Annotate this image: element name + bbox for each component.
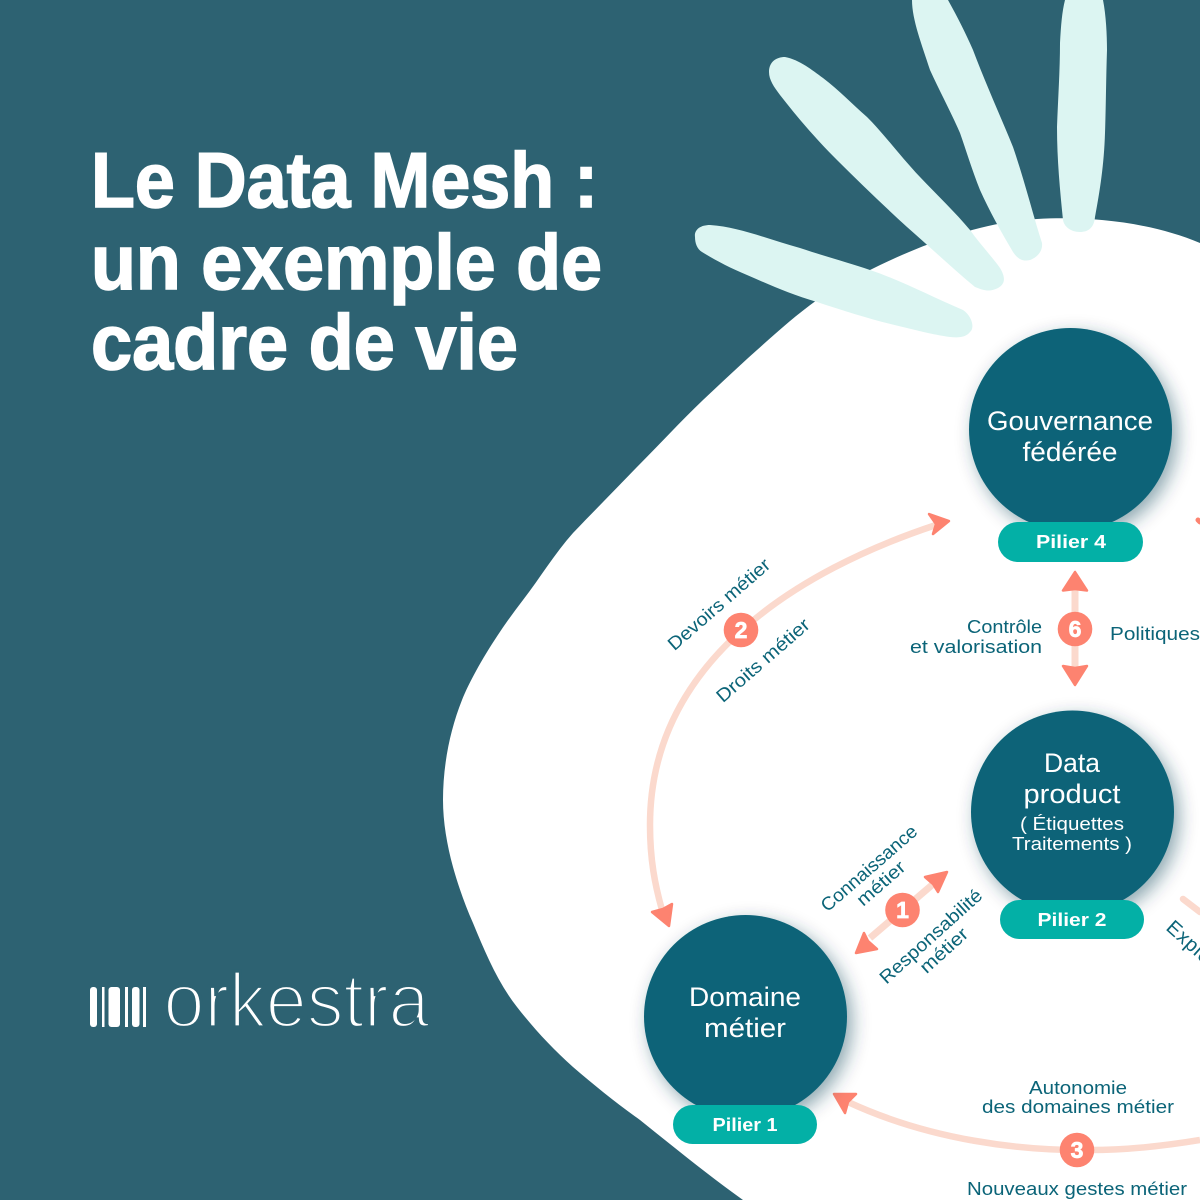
node: Gouvernance fédérée: fédérée	[1022, 437, 1118, 467]
icon: logo bars	[90, 987, 146, 1027]
label: métier (connaissance): métier	[852, 856, 910, 910]
label: métier (responsabilité): métier	[915, 923, 972, 977]
pill: Pilier 4	[998, 522, 1143, 562]
badge 6: 6	[1069, 616, 1081, 642]
label: Autonomie des domaines métier	[982, 1077, 1174, 1117]
node: Domaine métier	[644, 915, 847, 1144]
node: Domaine métier: Domaine	[689, 982, 801, 1012]
white blob	[443, 218, 1200, 1200]
logo wordmark: orkestra	[164, 958, 430, 1044]
node: Domaine métier: métier	[704, 1013, 786, 1043]
petals	[695, 0, 1107, 337]
pill: Pilier 2	[1000, 900, 1144, 939]
label: Autonomie des domaines métier: Autonomie	[1029, 1077, 1127, 1098]
badge 2	[724, 613, 758, 647]
pill: Pilier 1	[673, 1105, 817, 1144]
arrow: autonomie arc	[834, 1094, 1200, 1150]
title	[91, 136, 602, 386]
label: Contrôle et valorisation: et valorisation	[910, 636, 1042, 657]
arrow: contrôle	[1063, 572, 1087, 685]
label: Devoirs métier: Devoirs métier	[663, 554, 774, 654]
badge 3	[1060, 1133, 1094, 1167]
node: Data product	[971, 710, 1174, 939]
arrow: right partial	[1183, 520, 1200, 912]
arrow: droits et devoirs arc	[650, 514, 949, 926]
label: Connaissance: Connaissance	[816, 820, 921, 916]
badge 6	[1058, 612, 1092, 646]
logo: orkestra	[90, 958, 430, 1044]
label: Nouveaux gestes métier: Nouveaux gestes métier	[967, 1178, 1187, 1199]
badge 1	[885, 893, 920, 927]
node: Data product: product	[1024, 779, 1121, 809]
node: Data product: Traitements )	[1012, 833, 1132, 854]
badge 1: 1	[896, 897, 909, 923]
label: Autonomie des domaines métier: des domaines métier	[982, 1096, 1174, 1117]
node: Gouvernance fédérée: Gouvernance	[987, 406, 1153, 436]
pill: Pilier 1: Pilier 1	[712, 1114, 778, 1135]
badge 2: 2	[735, 617, 747, 643]
node: Data product: ( Étiquettes	[1020, 813, 1124, 834]
label: Contrôle et valorisation	[910, 616, 1042, 657]
label: Droits métier: Droits métier	[712, 614, 814, 706]
badge 3: 3	[1071, 1137, 1083, 1163]
node: Gouvernance fédérée	[969, 328, 1172, 562]
pill: Pilier 2: Pilier 2	[1038, 909, 1106, 930]
title: Le Data Mesh :	[91, 136, 598, 224]
label: Contrôle et valorisation: Contrôle	[967, 616, 1042, 637]
pill: Pilier 4: Pilier 4	[1036, 531, 1107, 552]
title: un exemple de	[91, 218, 602, 306]
title: cadre de vie	[91, 298, 518, 386]
label: Politiques: Politiques	[1110, 623, 1200, 644]
arrow: connaissance / responsabilité	[856, 872, 947, 953]
label: Responsabilité: Responsabilité	[875, 885, 986, 988]
node: Data product: Data	[1044, 748, 1101, 778]
